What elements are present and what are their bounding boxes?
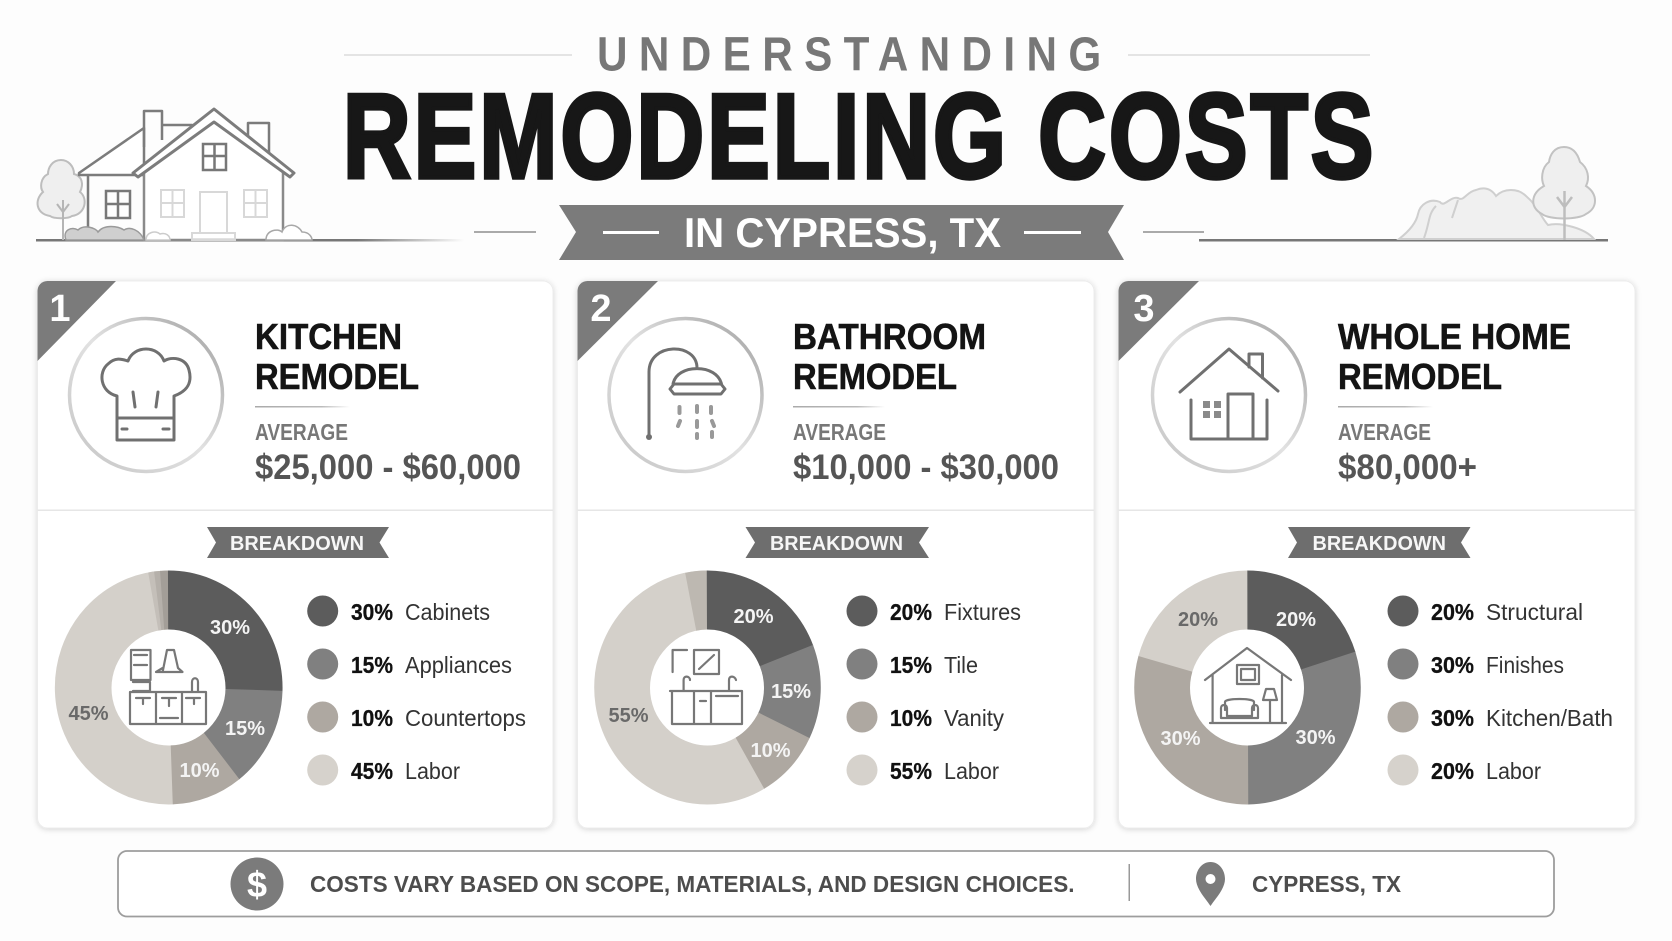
icon circle: house bbox=[1152, 318, 1306, 472]
heading: kitchen remodel: REMODEL bbox=[255, 356, 419, 397]
icon circle: shower bbox=[609, 318, 762, 472]
illustration: trees and bushes bbox=[1199, 147, 1608, 242]
ribbon: breakdown: BREAKDOWN bbox=[770, 533, 903, 555]
legend: whole home: 20% bbox=[1431, 758, 1474, 784]
average cost: $80,000+ bbox=[1338, 448, 1477, 487]
donut chart: whole home: 20% bbox=[1276, 609, 1316, 631]
donut chart: bathroom: 10% bbox=[750, 740, 791, 762]
ribbon: breakdown bbox=[207, 527, 389, 558]
legend: bathroom bbox=[846, 596, 1021, 786]
heading: bathroom remodel bbox=[793, 316, 986, 397]
legend: whole home: 30% bbox=[1431, 705, 1474, 731]
legend: bathroom: 15% bbox=[890, 652, 932, 678]
legend: kitchen: 30% bbox=[351, 599, 393, 625]
heading: kitchen remodel bbox=[255, 316, 419, 397]
average cost bbox=[793, 419, 1059, 487]
donut chart: kitchen: 45% bbox=[68, 703, 109, 725]
donut chart: whole home: 30% bbox=[1160, 728, 1201, 750]
corner number badge 1 bbox=[38, 281, 116, 361]
heading: understanding: UNDERSTANDING bbox=[597, 27, 1101, 81]
ribbon: breakdown: BREAKDOWN bbox=[1312, 533, 1446, 555]
legend: kitchen: 45% bbox=[351, 758, 393, 784]
legend: whole home: Structural bbox=[1486, 599, 1583, 625]
legend: whole home: Kitchen/Bath bbox=[1486, 705, 1613, 731]
donut chart: kitchen: 30% bbox=[210, 617, 250, 639]
average cost bbox=[255, 419, 521, 487]
heading: whole home remodel: WHOLE HOME bbox=[1338, 316, 1571, 357]
heading: whole home remodel bbox=[1338, 316, 1571, 397]
ribbon: breakdown bbox=[1288, 527, 1470, 558]
heading: bathroom remodel: BATHROOM bbox=[793, 316, 986, 357]
donut chart: bathroom bbox=[592, 568, 823, 807]
legend: whole home: 30% bbox=[1431, 652, 1474, 678]
legend: whole home: 20% bbox=[1431, 599, 1474, 625]
average cost: $10,000 - $30,000 bbox=[793, 448, 1059, 487]
title block bbox=[343, 27, 1373, 203]
legend: bathroom: 20% bbox=[890, 599, 932, 625]
banner: in cypress, tx bbox=[559, 205, 1124, 260]
panel: whole home remodel bbox=[1118, 281, 1635, 828]
legend: bathroom: Labor bbox=[944, 758, 999, 784]
footer location: CYPRESS, TX bbox=[1252, 871, 1402, 897]
icon: dollar coin: $ bbox=[247, 864, 267, 905]
corner number badge 3: 3 bbox=[1133, 288, 1155, 330]
illustration: house with tree bbox=[36, 109, 464, 242]
ribbon: breakdown: BREAKDOWN bbox=[230, 533, 364, 555]
donut chart: bathroom: 55% bbox=[608, 705, 649, 727]
footer note bar bbox=[118, 851, 1554, 916]
average cost: AVERAGE bbox=[793, 419, 886, 445]
panel: bathroom remodel bbox=[578, 281, 1094, 828]
legend: kitchen: Cabinets bbox=[405, 599, 490, 625]
donut chart: bathroom: 20% bbox=[733, 606, 774, 628]
footer text: COSTS VARY BASED ON SCOPE, MATERIALS, AND DESIGN CHOICES. bbox=[310, 871, 1074, 897]
panel: kitchen remodel bbox=[38, 281, 553, 828]
legend: kitchen: Labor bbox=[405, 758, 460, 784]
donut chart: whole home: 20% bbox=[1178, 609, 1218, 631]
icon: kitchen bbox=[130, 650, 206, 724]
donut chart: kitchen: 15% bbox=[225, 718, 265, 740]
icon: dollar coin bbox=[230, 858, 284, 910]
heading: whole home remodel: REMODEL bbox=[1338, 356, 1502, 397]
legend: kitchen bbox=[307, 596, 526, 786]
icon: location pin bbox=[1196, 862, 1225, 906]
heading: kitchen remodel: KITCHEN bbox=[255, 316, 402, 357]
ribbon: breakdown bbox=[746, 527, 929, 558]
corner number badge 2 bbox=[578, 281, 658, 361]
legend: bathroom: Tile bbox=[944, 652, 978, 678]
legend: whole home bbox=[1388, 596, 1613, 786]
average cost: $25,000 - $60,000 bbox=[255, 448, 521, 487]
legend: bathroom: Vanity bbox=[944, 705, 1004, 731]
corner number badge 2: 2 bbox=[590, 288, 612, 330]
icon: vanity bbox=[670, 650, 742, 724]
average cost: AVERAGE bbox=[255, 419, 348, 445]
donut chart: whole home bbox=[1141, 578, 1354, 797]
average cost: AVERAGE bbox=[1338, 419, 1431, 445]
legend: kitchen: Countertops bbox=[405, 705, 526, 731]
legend: bathroom: 55% bbox=[890, 758, 932, 784]
icon: living room house bbox=[1205, 648, 1291, 723]
donut chart: kitchen: 10% bbox=[179, 760, 220, 782]
heading: bathroom remodel: REMODEL bbox=[793, 356, 957, 397]
legend: bathroom: Fixtures bbox=[944, 599, 1021, 625]
heading: remodeling costs: REMODELING COSTS bbox=[343, 69, 1373, 203]
icon circle: chef hat bbox=[70, 318, 222, 472]
banner: in cypress, tx: IN CYPRESS, TX bbox=[684, 209, 1001, 256]
legend: kitchen: 15% bbox=[351, 652, 393, 678]
donut chart: bathroom: 15% bbox=[771, 681, 811, 703]
legend: whole home: Finishes bbox=[1486, 652, 1564, 678]
legend: bathroom: 10% bbox=[890, 705, 932, 731]
donut chart: whole home: 30% bbox=[1295, 727, 1336, 749]
legend: whole home: Labor bbox=[1486, 758, 1541, 784]
average cost bbox=[1338, 419, 1477, 487]
legend: kitchen: 10% bbox=[351, 705, 393, 731]
corner number badge 1: 1 bbox=[49, 288, 71, 330]
corner number badge 3 bbox=[1118, 281, 1199, 361]
legend: kitchen: Appliances bbox=[405, 652, 512, 678]
donut chart: kitchen bbox=[49, 565, 288, 810]
